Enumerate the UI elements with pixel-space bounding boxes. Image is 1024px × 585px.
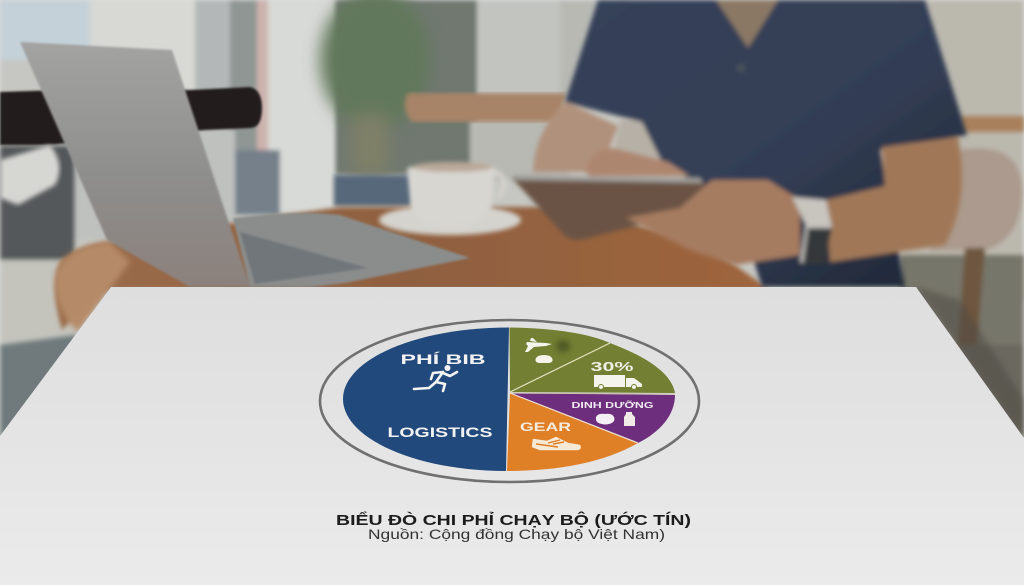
label: logistics: LOGISTICS (388, 424, 492, 440)
slice: gear (507, 393, 638, 471)
man: collar skin (716, 0, 778, 48)
label: 30%: 30% (590, 359, 634, 374)
gap behind left arm (610, 120, 670, 170)
chart outer ring (320, 320, 699, 482)
laptop (20, 42, 470, 287)
label: phí bib: PHÍ BIB (400, 351, 486, 367)
man: hand (626, 180, 800, 265)
icon: airplane (525, 338, 552, 352)
black chair back (0, 87, 262, 145)
icon: bottle (624, 412, 635, 426)
plant (320, 0, 430, 175)
coffee cup and saucer (379, 162, 521, 235)
background photo: cafe scene (0, 0, 1024, 445)
floor shadow (0, 335, 90, 440)
laptop: lid (20, 42, 250, 287)
icon: runner (414, 365, 457, 391)
man: right arm (826, 137, 962, 262)
title: BIỂU ĐÒ CHI PHỈ CHẠY BỘ (ƯỚC TÍN) (336, 511, 691, 529)
watch (792, 197, 832, 264)
small back table (405, 93, 566, 122)
slice: nutrition (510, 393, 675, 443)
icon: delivery truck (594, 375, 642, 390)
man: left arm (533, 102, 618, 172)
slice divider lines (510, 343, 675, 443)
source line: Nguồn: Cộng đồng Chạy bộ Việt Nam) (368, 526, 665, 542)
main table (55, 207, 770, 330)
label: gear: GEAR (520, 420, 571, 434)
pie chart (320, 320, 699, 482)
slice: 30 percent (510, 343, 675, 393)
slice: travel (510, 328, 610, 392)
plant pot (334, 175, 412, 206)
icon: running shoe (532, 437, 581, 450)
background: wall and window (0, 0, 1024, 350)
right rail and chair (900, 116, 1024, 445)
white cloth on chair (0, 145, 59, 205)
label: dinh dưỡng: DINH DƯỠNG (572, 400, 654, 410)
man: shirt (565, 0, 967, 287)
laptop: base (233, 213, 470, 287)
slice: phí bib and logistics (343, 328, 509, 471)
paper sheet (0, 287, 1024, 585)
icon: apple (596, 414, 614, 424)
laptop: keyboard (240, 232, 368, 284)
icon: apple (535, 355, 553, 363)
man (512, 0, 967, 287)
smudge on chart (556, 340, 570, 352)
tablet (512, 178, 720, 240)
right shadow next to paper (916, 287, 1024, 438)
man: button (737, 64, 745, 72)
